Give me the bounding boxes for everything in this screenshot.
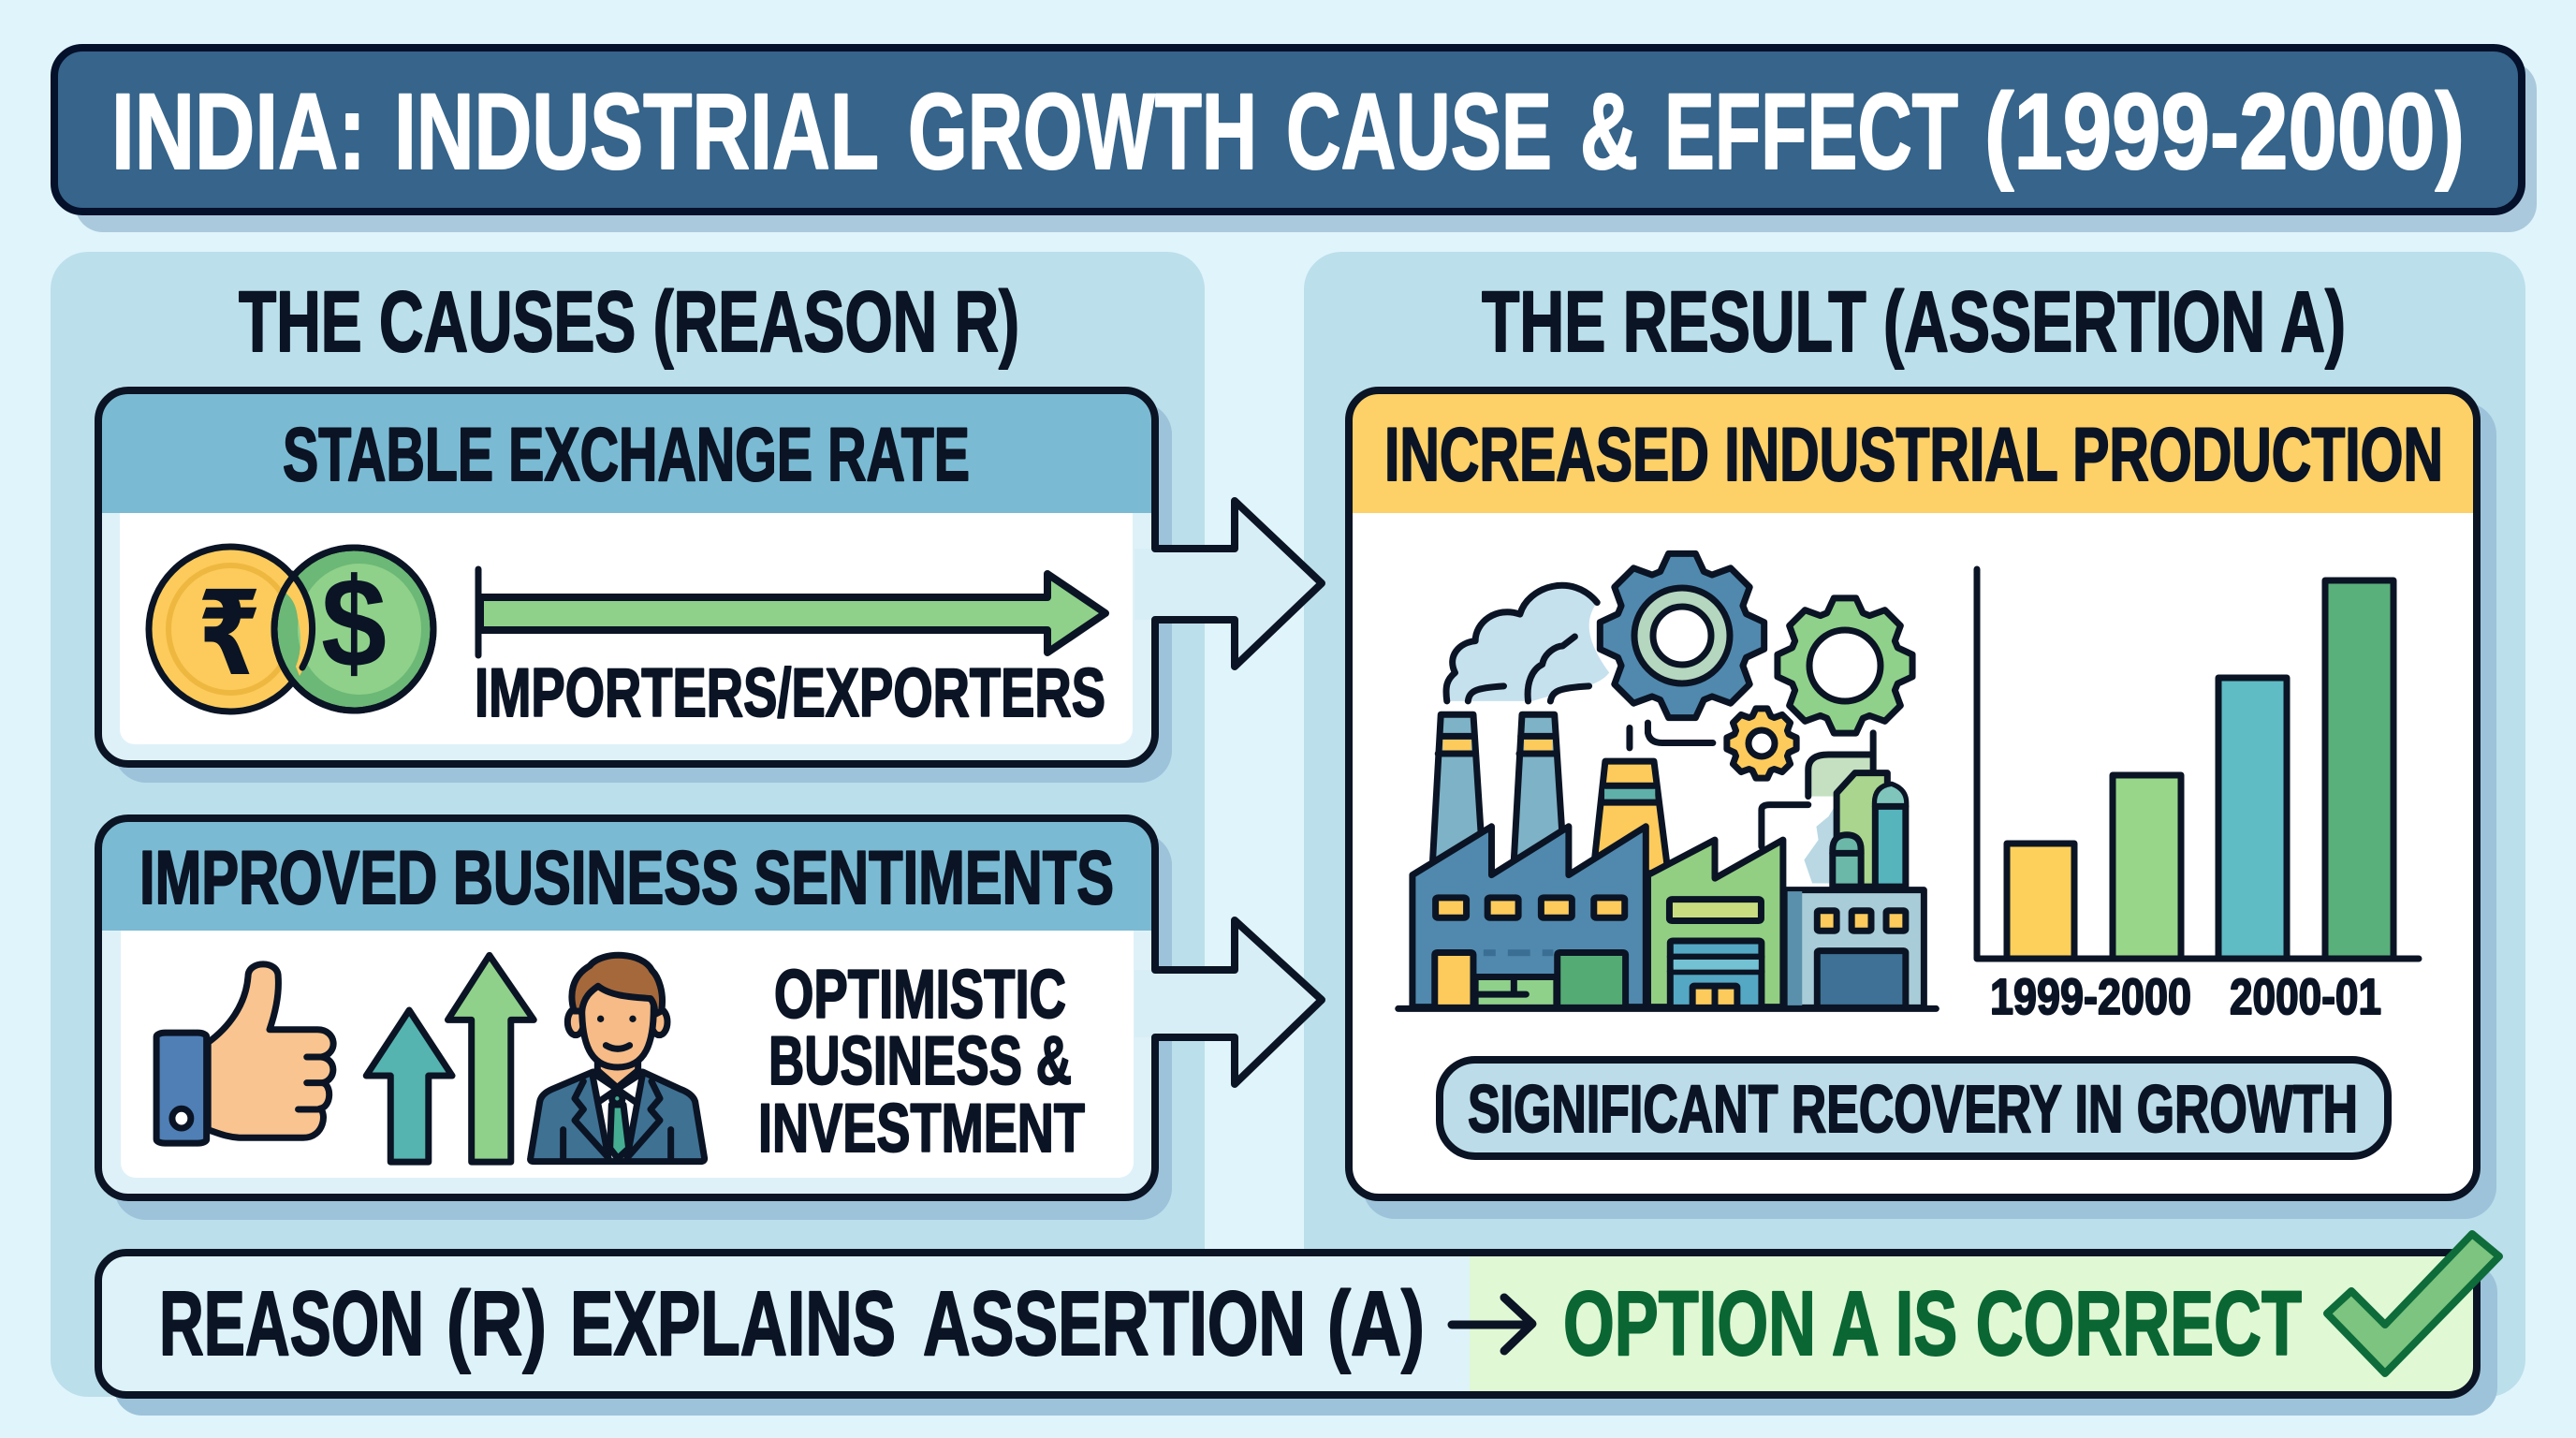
icon: rupee and dollar coins: ₹: [198, 566, 261, 702]
axis label: 2000-01: 2000-01: [2230, 969, 2381, 1025]
icon: small yellow gear: [1727, 709, 1796, 778]
text: reason explains assertion: EXPLAINS: [570, 1272, 896, 1374]
icon: check mark: [2327, 1234, 2499, 1373]
title banner: INDUSTRIAL: [394, 72, 879, 192]
icons: thumb and growth arrows: [156, 955, 534, 1162]
text: optimistic business and investment: BUSINESS &: [768, 1023, 1072, 1099]
blue factory building: [1412, 827, 1646, 1007]
axis label: 1999-2000: 1999-2000: [1990, 969, 2191, 1025]
panel: causes background: [51, 252, 1205, 1397]
title banner: &: [1580, 72, 1638, 192]
text: reason explains assertion: ASSERTION: [923, 1272, 1306, 1374]
icon: factory: [1398, 585, 1936, 1008]
text: optimistic business and investment: INVESTMENT: [758, 1091, 1085, 1167]
title banner: GROWTH: [908, 72, 1257, 192]
text: reason explains assertion: REASON: [159, 1272, 424, 1374]
arrow: two-way trade flow: [478, 569, 1105, 655]
card: improved business sentiments: [98, 818, 1172, 1220]
icon: rupee and dollar coins: $: [321, 551, 387, 694]
background tanks: [1762, 733, 1906, 887]
chimneys: [1433, 714, 1713, 873]
title banner: EFFECT: [1664, 72, 1958, 192]
title banner: (1999-2000): [1984, 72, 2465, 192]
callout: significant recovery in growth: [1440, 1060, 2388, 1156]
text: reason explains assertion: (R): [446, 1272, 547, 1374]
icon: businessman: [531, 955, 705, 1162]
icon: thumbs up: [156, 964, 333, 1143]
icon: rupee and dollar coins: [149, 547, 433, 712]
card heading: IMPROVED BUSINESS SENTIMENTS: [139, 836, 1114, 920]
panel: result background: [1304, 252, 2525, 1397]
text: reason explains assertion: (A): [1327, 1272, 1425, 1374]
icon: large blue gear: [1600, 553, 1764, 718]
bar chart: industrial growth: [1977, 569, 2419, 1025]
text: optimistic business and investment: [758, 957, 1085, 1167]
ground line: [1398, 1005, 1936, 1012]
title banner: CAUSE: [1286, 72, 1552, 192]
icon: short teal up arrow: [366, 1010, 452, 1162]
smoke cloud: [1446, 585, 1609, 701]
card: stable exchange rate: [98, 390, 1172, 783]
conclusion banner: [98, 1234, 2499, 1416]
text: option a is correct: OPTION A IS CORRECT: [1563, 1272, 2302, 1374]
label: importers and exporters: IMPORTERS/EXPORTERS: [475, 655, 1105, 731]
text: optimistic business and investment: OPTIMISTIC: [774, 957, 1066, 1033]
grey-blue factory building: [1786, 890, 1924, 1007]
card heading: STABLE EXCHANGE RATE: [283, 413, 970, 497]
card: increased industrial production: [1349, 390, 2496, 1219]
heading: causes: THE CAUSES (REASON R): [239, 274, 1019, 370]
text: reason explains assertion: [159, 1272, 1425, 1374]
green factory building: [1647, 840, 1783, 1007]
arrow: sentiments to result: [1134, 848, 1322, 1168]
icon: green gear: [1778, 598, 1912, 733]
arrow: leads to option: [1452, 1298, 1532, 1351]
icon: tall green up arrow: [447, 955, 534, 1162]
title banner: [54, 48, 2537, 232]
title banner: INDIA:: [111, 72, 366, 192]
arrow: exchange rate to result: [1134, 421, 1322, 735]
